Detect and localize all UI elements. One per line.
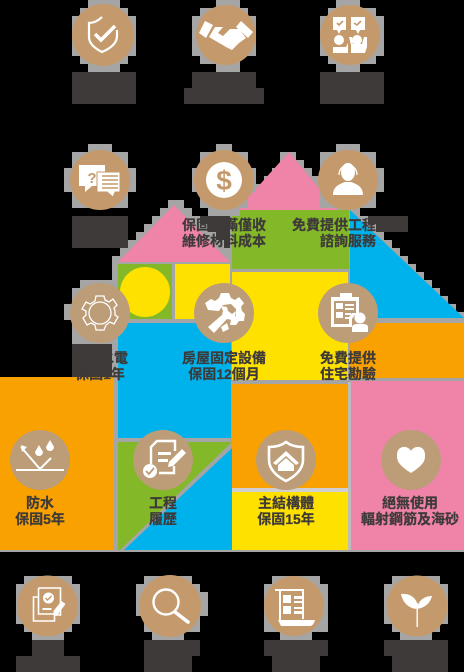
block: right orange — [350, 323, 464, 378]
item: engineering record — [133, 430, 193, 490]
icon: shield check — [89, 17, 117, 52]
item: bottom sprout — [384, 576, 448, 672]
item: waterproof — [10, 430, 70, 490]
item: second row headset — [318, 144, 384, 210]
block: left orange — [0, 377, 114, 550]
label block — [16, 640, 80, 672]
item: top right people — [320, 0, 384, 104]
icon: wrench and gear — [205, 293, 245, 333]
block: central yellow — [232, 272, 348, 380]
label block — [264, 640, 328, 672]
label block — [144, 640, 200, 672]
icon: clipboard and person — [331, 293, 368, 332]
block: blue right roof — [350, 210, 464, 318]
text: second row right — [292, 217, 404, 249]
text: waterproof — [15, 495, 65, 527]
seam: light side gap — [348, 382, 351, 550]
icon: speech bubbles: ? — [87, 170, 97, 187]
item: structure — [256, 430, 316, 490]
item: third row gear — [70, 283, 130, 343]
item: top middle handshake — [184, 0, 264, 104]
text: no radiation: 絕無使用 — [382, 495, 438, 511]
item: second row question — [64, 144, 136, 248]
text: structure — [257, 495, 315, 527]
text: third row right — [320, 350, 376, 382]
block: centre orange — [232, 384, 348, 488]
text: no radiation — [361, 495, 459, 527]
item: no radiation — [381, 430, 441, 490]
item: top left shield — [72, 0, 136, 104]
block: centre yellow — [232, 492, 348, 550]
icon: documents and check — [143, 441, 186, 478]
text: waterproof: 防水 — [26, 495, 54, 511]
icon: plant sprout — [401, 594, 432, 627]
icon: water repellent — [16, 440, 64, 470]
icon: signed documents — [34, 588, 66, 621]
seam: light gap — [232, 488, 352, 492]
text: second row right: 諮詢服務 — [320, 233, 376, 249]
text: second row middle: 保固期滿僅收 — [182, 217, 266, 233]
icon: heart — [397, 447, 425, 473]
house seams — [0, 152, 464, 552]
item: bottom magnifier — [136, 575, 208, 672]
item: third row clipboard — [318, 283, 378, 343]
label block — [320, 72, 384, 104]
block: yellow square — [175, 264, 230, 319]
text: second row middle — [182, 217, 266, 249]
icon: gear — [82, 296, 118, 330]
text shadow blocks behind house — [72, 216, 408, 384]
item: second row dollar — [192, 144, 256, 216]
text: third row right: 免費提供 — [320, 350, 376, 366]
block: green square with yellow circle — [118, 264, 172, 319]
text: third row middle: 房屋固定設備 — [182, 350, 266, 366]
text: second row middle: 維修材料成本 — [182, 233, 266, 249]
text: third row middle: 保固12個月 — [188, 366, 260, 382]
item: bottom scroll — [264, 576, 328, 672]
item: bottom documents — [16, 576, 80, 672]
text: third row left: 室內水電 — [72, 350, 128, 366]
icon: magnifying glass — [154, 590, 188, 622]
item: third row wrench gear — [194, 283, 254, 343]
text: third row left — [72, 350, 128, 382]
text: structure: 保固15年 — [257, 511, 315, 527]
icon: dollar coin: $ — [216, 165, 232, 196]
text: second row right: 免費提供工程技術 — [292, 217, 404, 233]
panel: house blocks — [0, 152, 464, 552]
block: green wall — [232, 210, 349, 269]
label block — [184, 72, 264, 104]
text: waterproof: 保固5年 — [15, 511, 65, 527]
icon: headset agent — [333, 163, 363, 195]
gear halo behind house — [64, 280, 118, 344]
text: third row left: 保固1年 — [75, 366, 125, 382]
label block — [72, 216, 128, 248]
icon: checklist scroll — [275, 590, 315, 626]
text: engineering record — [149, 495, 177, 527]
text: third row middle — [182, 350, 266, 382]
icon: people with checks — [333, 17, 367, 53]
text: structure: 主結構體 — [258, 495, 314, 511]
block: green triangle — [118, 442, 232, 550]
text: engineering record: 履歷 — [149, 511, 177, 527]
block: small pink roof — [118, 205, 230, 262]
block: blue square — [118, 323, 231, 438]
label block — [384, 640, 448, 672]
block: large pink roof — [237, 152, 337, 210]
icon: handshake — [199, 21, 253, 50]
block: blue triangle — [124, 448, 232, 550]
icon: shield house — [269, 442, 303, 481]
text: no radiation: 輻射鋼筋及海砂 — [361, 511, 459, 527]
block: right pink — [351, 381, 464, 550]
text: third row right: 住宅勘驗 — [320, 366, 376, 382]
label block — [72, 72, 136, 104]
text: engineering record: 工程 — [149, 495, 177, 511]
